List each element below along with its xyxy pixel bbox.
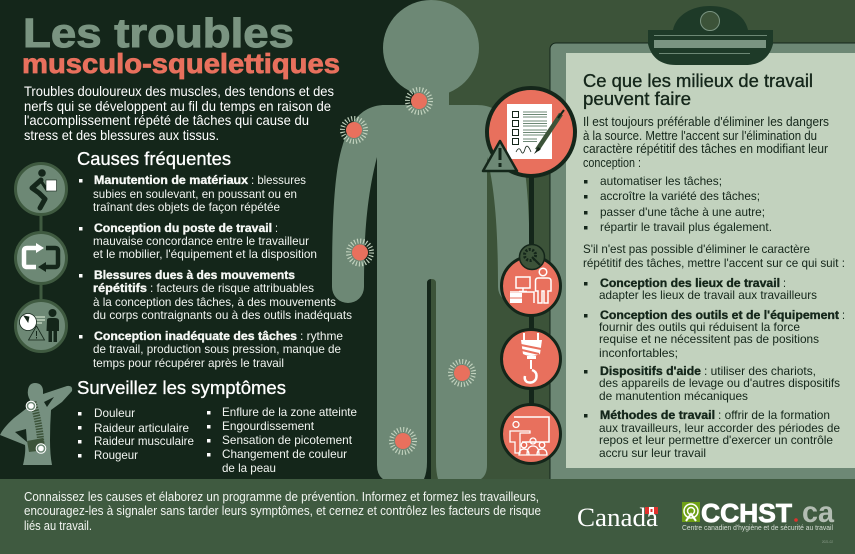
measure: assistive devices <box>584 364 840 403</box>
measure: tools and equipment: fournir des outils qui réduisent la force <box>599 320 800 334</box>
title: musculo-squelettiques <box>22 48 340 79</box>
list: task changes <box>584 174 772 234</box>
measure: workplace design: Conception des lieux de travail <box>600 276 780 290</box>
paragraph: if not possible <box>583 242 845 270</box>
cause: workstation design: et le mobilier, l'équipement et la disposition <box>93 247 317 261</box>
cause: material handling <box>79 173 306 214</box>
measure: tools and equipment: requise et ne nécessitent pas de positions <box>599 332 819 346</box>
cause: repetitive motion injuries: du corps contraignants ou à des outils inadéquats <box>93 308 352 322</box>
cause: material handling: subies en soulevant, en poussant ou en <box>93 187 297 201</box>
logo: CCHST: CCHST <box>701 498 792 528</box>
measure: work methods: Méthodes de travail <box>600 408 715 422</box>
measure: tools and equipment: : <box>842 308 845 322</box>
pain point: neck <box>408 90 430 112</box>
symptoms list: column one: Raideur musculaire <box>94 434 194 448</box>
footer text: liés au travail. <box>24 518 92 533</box>
paragraph: eliminate hazards: Il est toujours préférable d'éliminer les dangers <box>583 115 829 129</box>
measure: tools and equipment: inconfortables; <box>599 346 678 360</box>
paragraph: eliminate hazards: à la source. Mettre l'accent sur l'élimination du <box>583 129 817 143</box>
symptoms list: column two <box>207 405 357 475</box>
pain point: shoulder <box>342 118 366 142</box>
connector line between action icons <box>529 170 534 410</box>
cause: poor task design: temps pour récupérer après le travail <box>93 356 284 370</box>
measure: work methods <box>584 408 840 460</box>
cause: poor task design <box>79 329 343 370</box>
panel heading: workplaces <box>583 71 813 109</box>
measure: tools and equipment: Conception des outils et de l'équipement <box>600 308 839 322</box>
title: Les troubles <box>23 10 294 56</box>
intro paragraph: stress et des blessures aux tissus. <box>24 127 219 143</box>
measure: assistive devices: Dispositifs d'aide <box>600 364 701 378</box>
cause: repetitive motion injuries: : facteurs de risque attribuables <box>150 281 314 295</box>
panel heading: workplaces: peuvent faire <box>583 89 691 109</box>
cause: material handling: traînant des objets de façon répétée <box>93 200 280 214</box>
cause: workstation design: Conception du poste de travail <box>94 221 272 235</box>
cause: workstation design: : <box>275 221 278 235</box>
paragraph: eliminate hazards <box>583 115 829 170</box>
title <box>22 10 340 79</box>
cause: material handling: : blessures <box>251 173 306 187</box>
icon: repetition arrows <box>16 232 66 284</box>
cause: workstation design: mauvaise concordance entre le travailleur <box>93 234 309 248</box>
cause: material handling: Manutention de matériaux <box>94 173 248 187</box>
paragraph: eliminate hazards: conception : <box>583 156 641 170</box>
causes list <box>79 173 352 370</box>
icon: training session <box>502 404 560 464</box>
measure: assistive devices: des appareils de levage ou d'autres dispositifs <box>599 376 840 390</box>
human body silhouette <box>332 0 530 479</box>
pain point: right hip <box>450 362 474 384</box>
footer text: Connaissez les causes et élaborez un programme de prévention. Informez et formez les travailleurs, <box>24 489 539 504</box>
icon: warning triangle <box>483 141 517 171</box>
icon connector <box>40 210 42 310</box>
logo: CCHST: ca <box>802 496 834 529</box>
footer text: encouragez-les à signaler sans tarder leurs symptômes, et cernez et contrôlez les facteurs de risque <box>24 503 541 518</box>
pain point: left knee <box>392 430 414 452</box>
logo: CCHST: 2021-02 <box>822 539 834 544</box>
intro paragraph <box>24 83 334 143</box>
icon: checklist <box>487 88 575 176</box>
measure: work methods: accru sur leur travail <box>599 446 706 460</box>
logo: Canada: Canada <box>577 503 658 532</box>
panel heading: workplaces: Ce que les milieux de travail <box>583 71 813 91</box>
measure: assistive devices: de manutention mécaniques <box>599 389 748 403</box>
logo: CCHST <box>682 496 834 544</box>
icon: time pressure <box>16 300 66 352</box>
measure: tools and equipment <box>584 308 845 360</box>
intro paragraph: Troubles douloureux des muscles, des tendons et des <box>24 83 334 99</box>
measure: workplace design <box>584 276 817 302</box>
cause: repetitive motion injuries: Blessures dues à des mouvements <box>94 268 295 282</box>
heading: causes: Causes fréquentes <box>77 149 231 169</box>
list: task changes: répartir le travail plus également. <box>600 220 772 234</box>
measure: workplace design: : <box>783 276 786 290</box>
paragraph: if not possible: S'il n'est pas possible d'éliminer le caractère <box>583 242 810 256</box>
symptoms list: column one: Douleur <box>94 406 135 420</box>
symptoms list: column two: Engourdissement <box>222 419 315 433</box>
intro paragraph: l'accomplissement répété de tâches qui cause du <box>24 112 309 128</box>
paragraph: eliminate hazards: caractère répétitif des tâches en modifiant leur <box>583 142 828 156</box>
icon: crane hook <box>502 330 560 388</box>
intro paragraph: nerfs qui se développent au fil du temps en raison de <box>24 98 331 114</box>
icon: workstation design <box>502 256 560 316</box>
heading: symptoms: Surveillez les symptômes <box>77 378 286 398</box>
symptoms list: column two: Enflure de la zone atteinte <box>222 405 357 419</box>
footer text <box>24 489 541 533</box>
cause: poor task design: de travail, production sous pression, manque de <box>93 342 341 356</box>
measure: work methods: aux travailleurs, leur accorder des périodes de <box>599 421 840 435</box>
list: task changes: passer d'une tâche à une autre; <box>600 205 765 219</box>
cause: repetitive motion injuries: à la conception des tâches, à des mouvements <box>93 295 336 309</box>
list: task changes: automatiser les tâches; <box>600 174 722 188</box>
symptoms list: column two: Changement de couleur <box>222 447 347 461</box>
symptoms list: column two: Sensation de picotement <box>222 433 353 447</box>
clipboard clip <box>648 6 773 65</box>
measure: work methods: repos et leur permettre d'exercer un contrôle <box>599 433 833 447</box>
icon: back with pain points <box>0 383 72 465</box>
symptoms list: column one <box>78 406 194 462</box>
cause: workstation design <box>79 221 317 261</box>
symptoms list: column two: de la peau <box>222 461 276 475</box>
cause: poor task design: : rythme <box>300 329 343 343</box>
cause: repetitive motion injuries <box>79 268 352 322</box>
list: task changes: accroître la variété des tâches; <box>600 189 760 203</box>
icon: lifting materials <box>16 164 66 214</box>
clipboard <box>550 6 855 488</box>
symptoms list: column one: Rougeur <box>94 448 138 462</box>
icon: gear and wrench <box>520 244 544 270</box>
symptoms list: column one: Raideur articulaire <box>94 421 189 435</box>
paragraph: if not possible: répétitif des tâches, mettre l'accent sur ce qui suit : <box>583 256 845 270</box>
logo: CCHST: Centre canadien d'hygiène et de sécurité au travail <box>682 523 833 532</box>
cause: poor task design: Conception inadéquate des tâches <box>94 329 297 343</box>
measure: assistive devices: : utiliser des chariots, <box>704 364 816 378</box>
measure: work methods: : offrir de la formation <box>718 408 830 422</box>
cause: repetitive motion injuries: répétitifs <box>93 281 147 295</box>
pain point: elbow <box>348 241 372 264</box>
measure: workplace design: adapter les lieux de travail aux travailleurs <box>599 288 817 302</box>
list: design measures <box>584 276 845 460</box>
footer band <box>0 479 855 554</box>
